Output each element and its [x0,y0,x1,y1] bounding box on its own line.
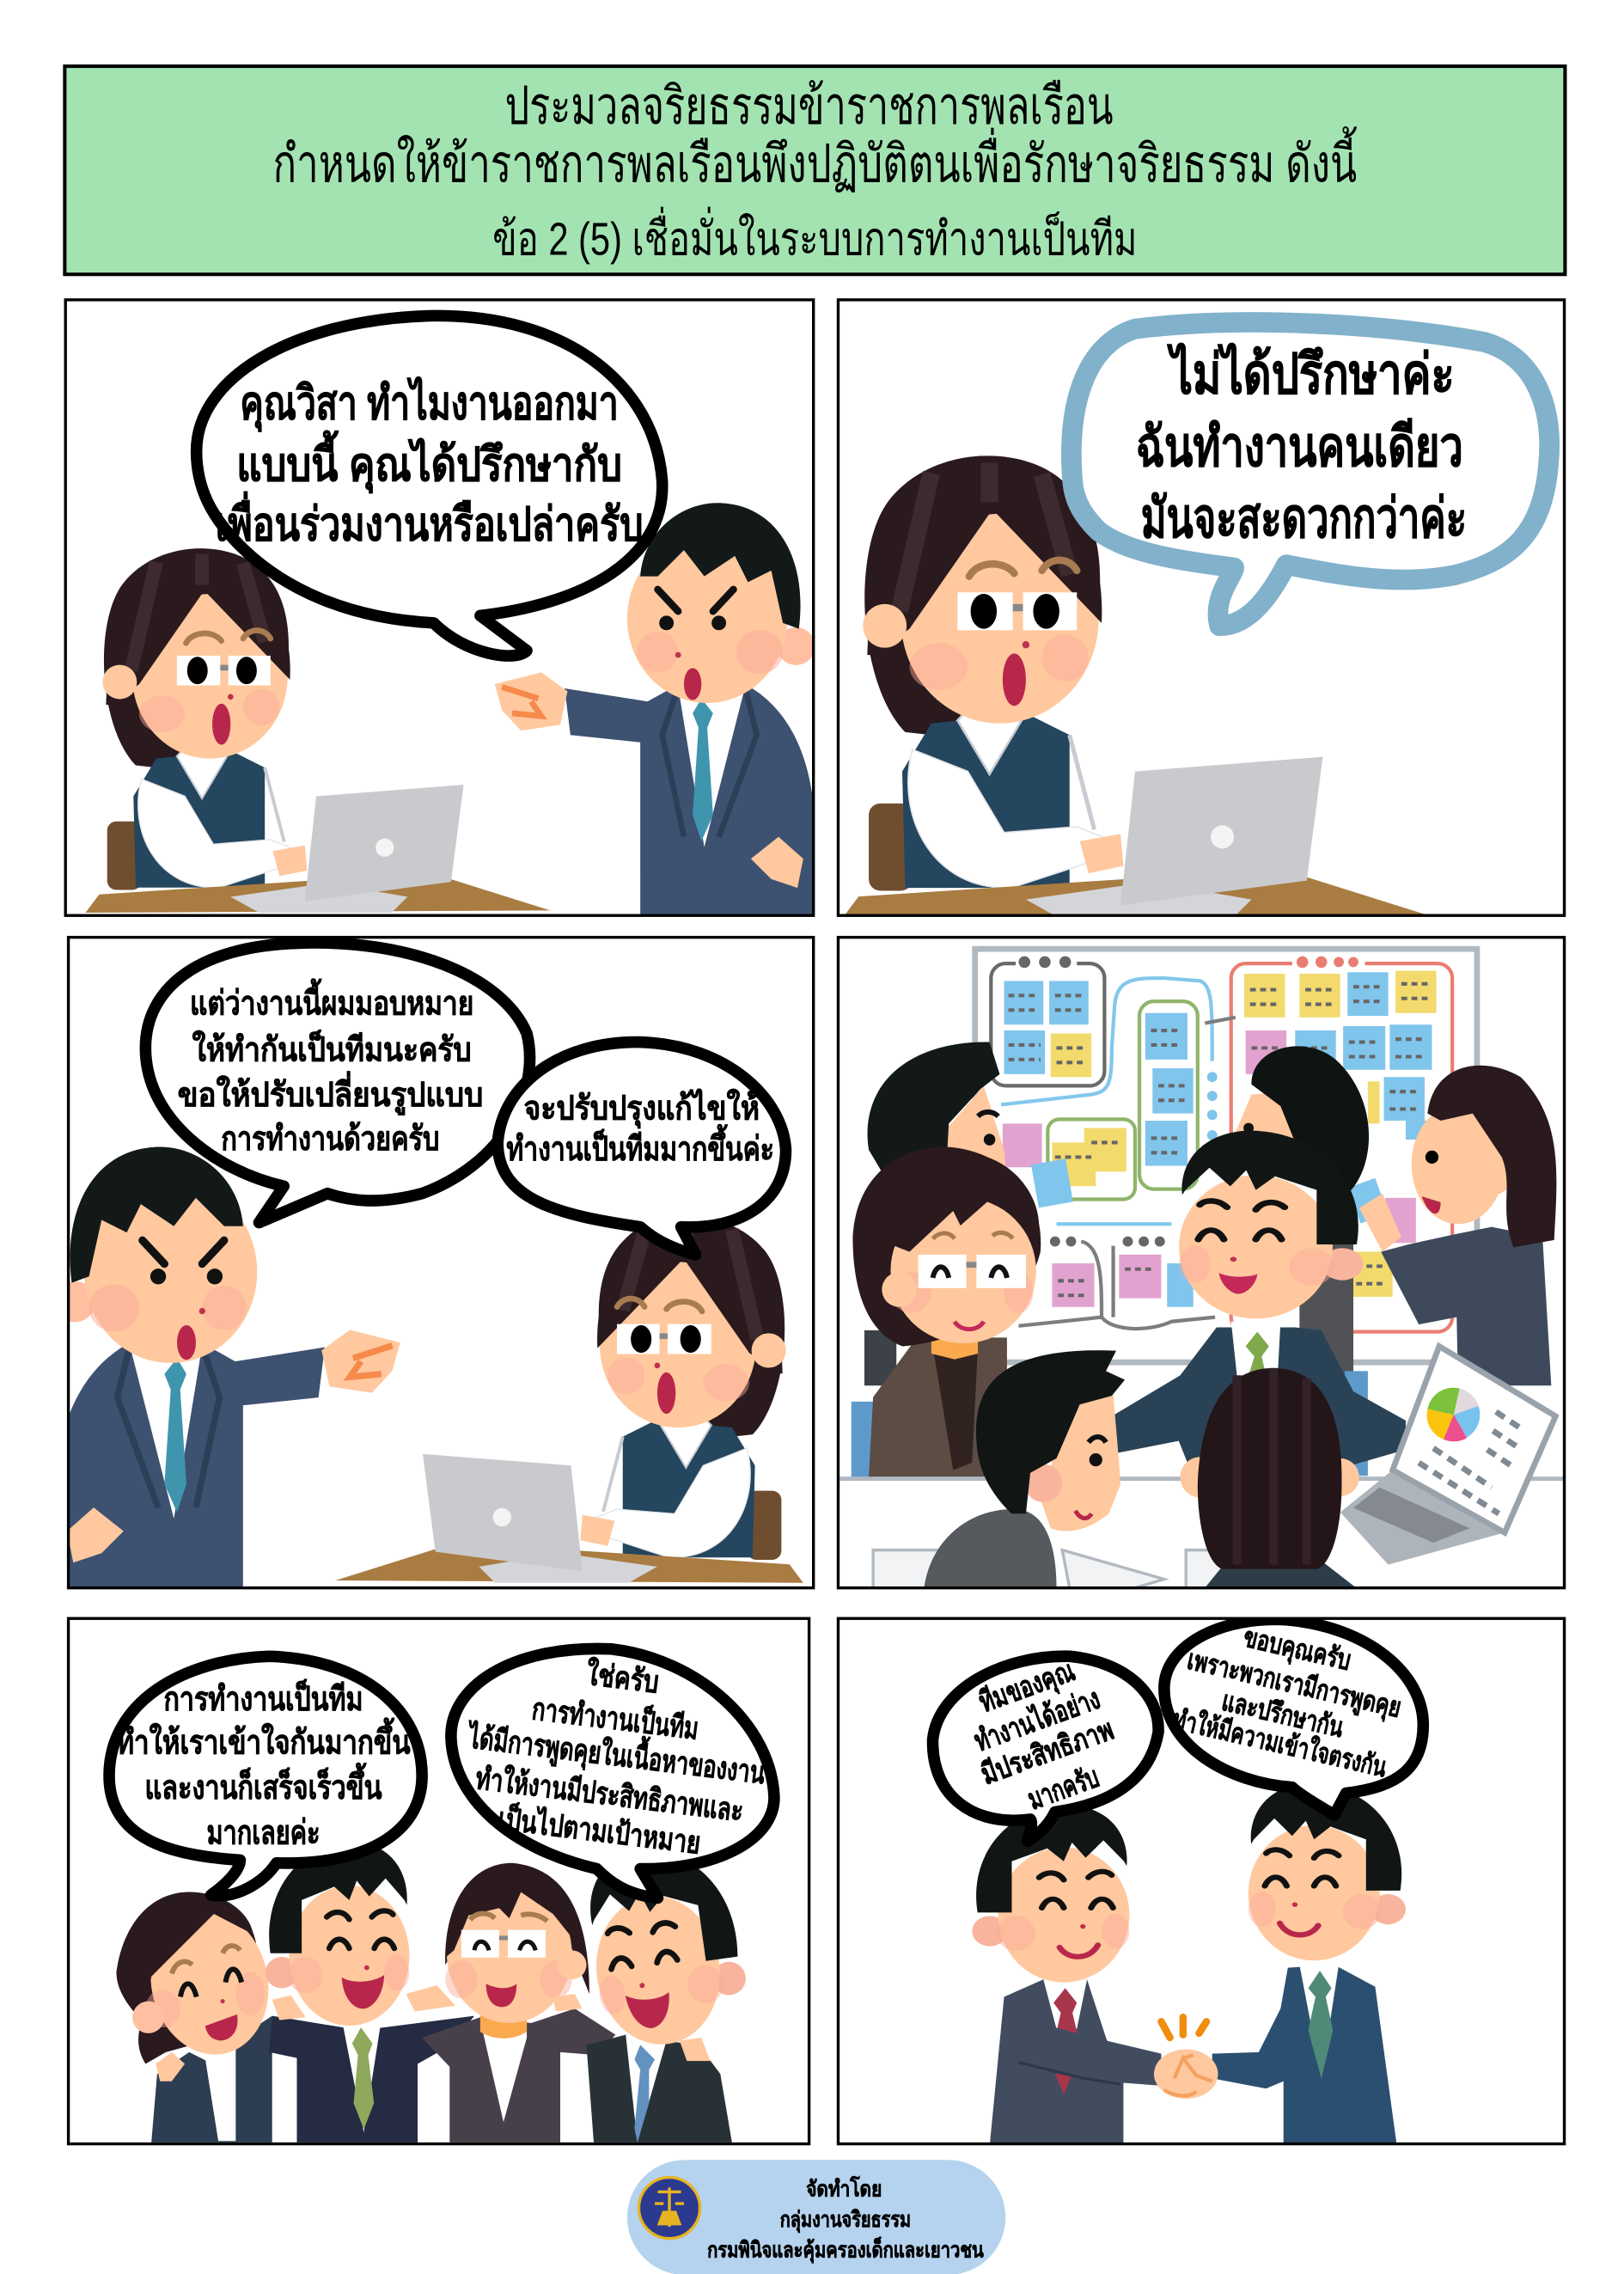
large speech bubble: การทำงานด้วยครับ [221,1121,439,1158]
woman at laptop, mirrored [335,1216,803,1583]
left speech bubble: ทำให้เราเข้าใจกันมากขึ้น [116,1718,411,1762]
man from behind, back left [868,1042,1007,1182]
small speech bubble: จะปรับปรุงแก้ไขให้ [524,1088,760,1128]
right speech bubble: ทำให้มีความเข้าใจตรงกัน [1170,1702,1389,1782]
large speech bubble [145,943,530,1223]
panel 5: four colleagues talk about teamwork [69,1618,809,2144]
left speech bubble: การทำงานเป็นทีม [164,1678,363,1718]
panel 4: team planning at whiteboard [838,938,1565,1588]
right speech bubble: ทำให้งานมีประสิทธิภาพและ [473,1760,745,1828]
speech bubble: เพื่อนร่วมงานหรือเปล่าครับ [216,491,644,550]
footer text [707,2176,984,2265]
table [839,1477,1565,1588]
blue speech bubble: มันจะสะดวกกว่าค่ะ [1141,487,1467,549]
man from behind, back centre [1232,1046,1369,1375]
small speech bubble [498,1042,786,1255]
boss pointing, mirrored [54,1147,400,1602]
small speech bubble: ทำงานเป็นทีมมากขึ้นค่ะ [506,1124,774,1168]
right speech bubble: ได้มีการพูดคุยในเนื้อหาของงาน [464,1714,767,1792]
footer text: กรมพินิจและคุ้มครองเด็กและเยาวชน [707,2237,984,2265]
large speech bubble: ให้ทำกันเป็นทีมนะครับ [192,1030,472,1069]
right speech bubble: เป็นไปตามเป้าหมาย [496,1799,703,1861]
left speech bubble: มีประสิทธิภาพ [977,1713,1118,1791]
blue speech bubble: ฉันทำงานคนเดียว [1136,416,1463,478]
man in centre with suit [1112,1131,1406,1477]
left speech bubble: ทีมของคุณ [975,1654,1080,1721]
left speech bubble: ทำงานได้อย่าง [970,1682,1104,1758]
blue chairs and grey chair [852,1330,1368,1477]
right speech bubble: เพราะพวกเรามีการพูดคุย [1184,1644,1404,1726]
handshake [1154,2050,1218,2099]
left speech bubble [109,1656,422,1896]
panel 6: two colleagues shake hands [838,1618,1565,2147]
right speech bubble: ใช่ครับ [584,1656,661,1700]
right speech bubble [451,1648,774,1898]
right speech bubble [1164,1619,1423,1815]
orange impact marks [1161,2017,1206,2038]
blue speech bubble: ไม่ได้ปรึกษาค่ะ [1167,341,1455,405]
panel 2: employee replies [838,300,1565,920]
woman at laptop [85,548,551,913]
colleague 2: man with green tie [266,1842,474,2143]
boss pointing [495,503,815,924]
group of colleagues [116,1839,754,2143]
speech bubble: คุณวิสา ทำไมงานออกมา [240,376,619,433]
large speech bubble: แต่ว่างานนี้ผมมอบหมาย [190,978,473,1022]
colleague 1: woman [116,1892,282,2143]
left speech bubble: และงานก็เสร็จเร็วขึ้น [145,1763,382,1806]
right speech bubble: ขอบคุณครับ [1240,1621,1354,1678]
footer credit pill [627,2160,1005,2274]
large speech bubble: ขอให้ปรับเปลี่ยนรูปแบบ [178,1071,483,1116]
icon: department seal [638,2178,700,2239]
speech bubble: แบบนี้ คุณได้ปรึกษากับ [236,430,622,494]
woman on right at whiteboard [1359,1066,1556,1385]
panel 3: boss asks for teamwork [54,938,814,1602]
footer text: จัดทำโดย [806,2176,882,2202]
woman with glasses in brown coat [852,1147,1041,1477]
foreground woman from behind [1180,1368,1359,1588]
man on right with green tie [1212,1783,1406,2147]
panel 1: boss questions the employee [65,300,815,924]
header banner [64,66,1565,274]
left speech bubble [933,1654,1158,1841]
laptop with pie chart [1340,1347,1555,1565]
right speech bubble: และปรึกษากัน [1219,1685,1346,1743]
woman at laptop, close-up [841,455,1433,920]
left speech bubble: มากครับ [1023,1761,1103,1817]
speech bubble [197,315,662,656]
heading line 1: ประมวลจริยธรรมข้าราชการพลเรือน [505,76,1114,135]
colleague 3: woman with glasses [406,1863,615,2143]
colleague 4: man with blue tie [586,1868,746,2143]
blue speech bubble [1071,322,1549,626]
whiteboard with sticky notes [975,949,1477,1362]
right speech bubble: การทำงานเป็นทีม [530,1689,701,1746]
heading line 3: ข้อ 2 (5) เชื่อมั่นในระบบการทำงานเป็นทีม [492,206,1138,265]
left speech bubble: มากเลยค่ะ [206,1815,321,1852]
footer text: กลุ่มงานจริยธรรม [780,2208,911,2234]
man on left with red tie [972,1806,1161,2147]
foreground man in profile [924,1350,1125,1588]
